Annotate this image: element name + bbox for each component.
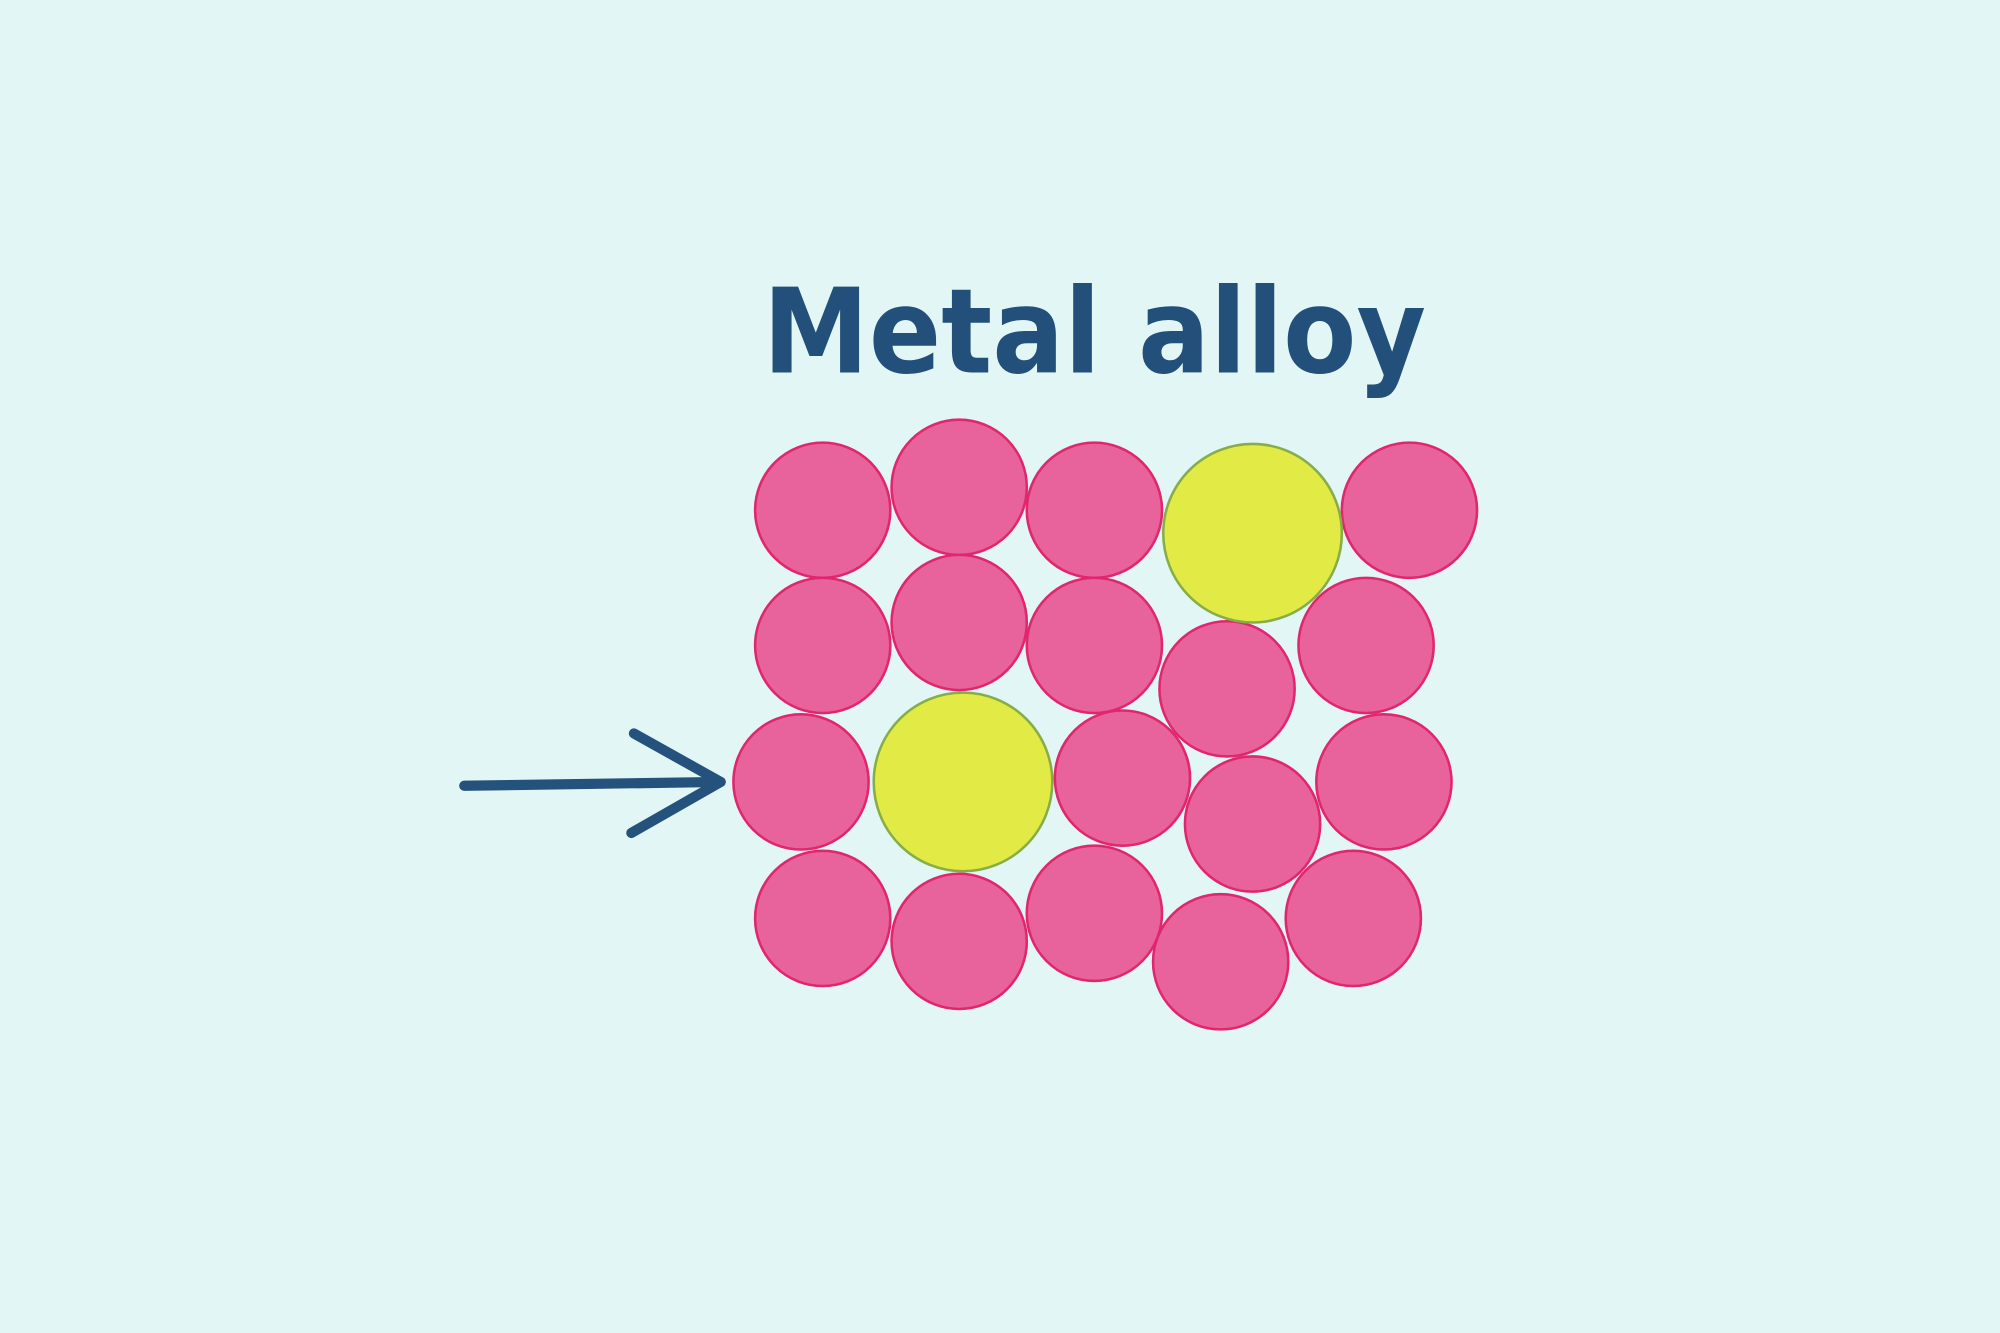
row 1 atoms	[755, 420, 1477, 578]
atom lattice	[733, 420, 1477, 1029]
title: Metal alloy	[763, 263, 1426, 400]
row 4 atoms	[755, 846, 1421, 1029]
arrow: force direction	[464, 733, 721, 833]
alloy atoms (yellow)	[874, 444, 1342, 871]
row 2 atoms	[755, 555, 1434, 756]
row 3 atoms	[733, 711, 1452, 892]
